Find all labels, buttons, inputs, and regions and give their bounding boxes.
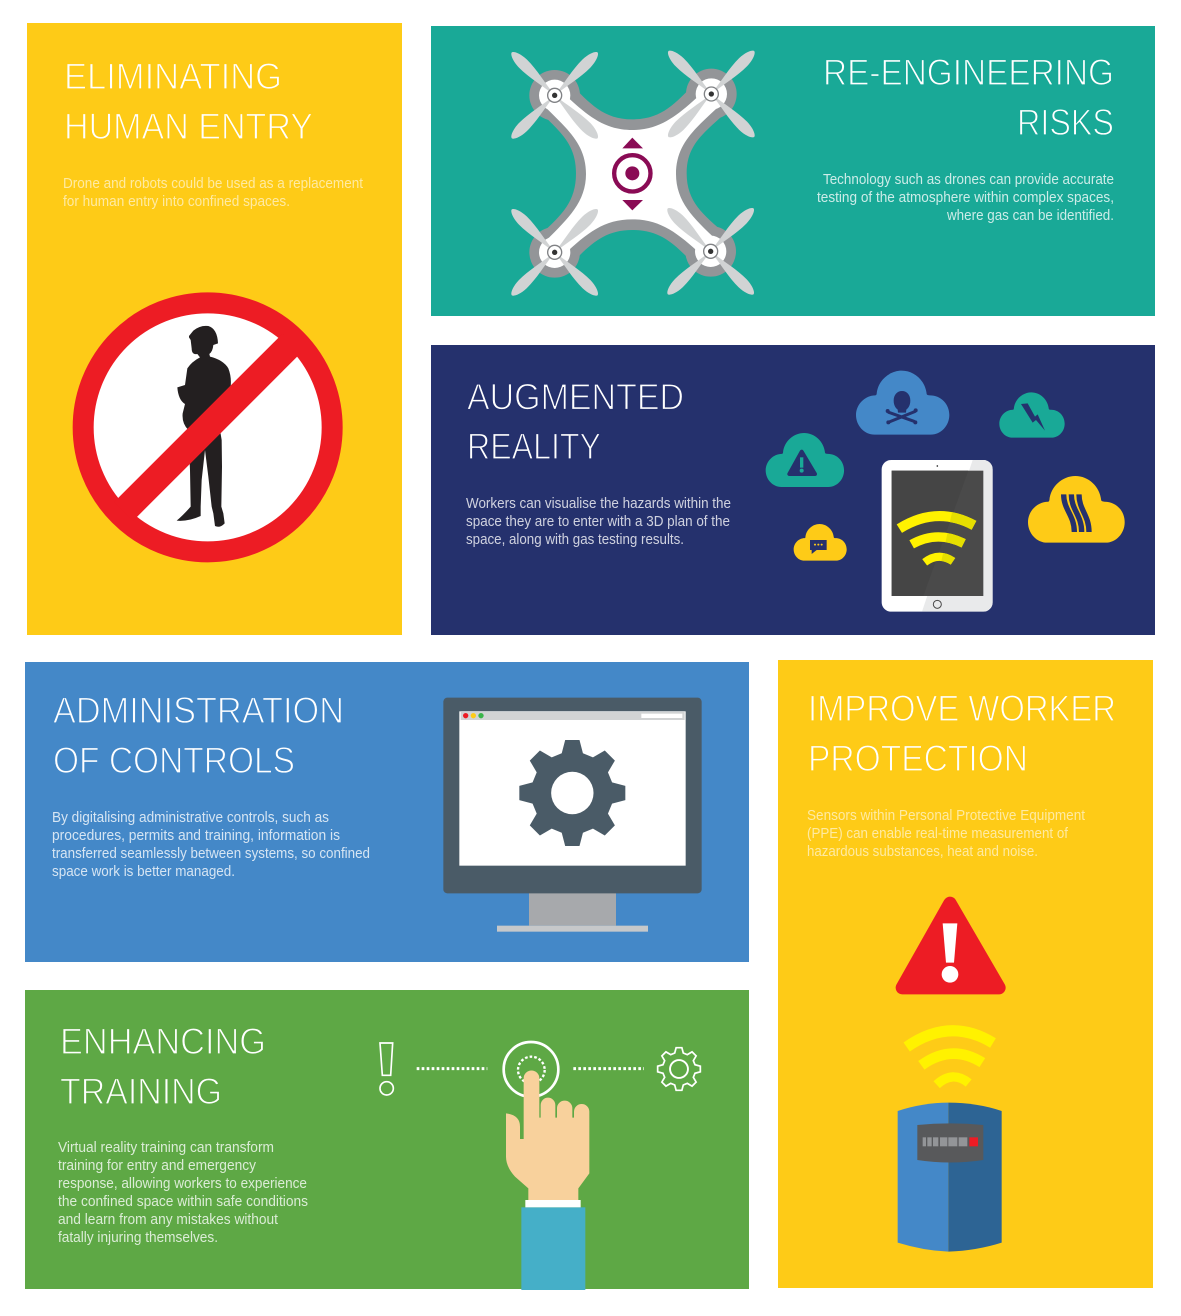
icon: heat cloud bbox=[1028, 476, 1125, 543]
heading: enhancing training bbox=[60, 1021, 266, 1112]
heading: enhancing training: ENHANCING bbox=[60, 1021, 266, 1062]
drone hubs bbox=[548, 87, 718, 259]
icon: drone bbox=[508, 47, 758, 299]
text: re-engineering risks body: where gas can be identified. bbox=[946, 207, 1114, 224]
heading: augmented reality: REALITY bbox=[467, 426, 601, 467]
text: augmented reality body: space, along with gas testing results. bbox=[466, 531, 684, 548]
text: augmented reality body: Workers can visualise the hazards within the bbox=[466, 495, 731, 512]
icon: pointing hand bbox=[506, 1070, 589, 1200]
text: enhancing training body: training for entry and emergency bbox=[58, 1157, 256, 1174]
icon: gear bbox=[519, 740, 625, 846]
text: re-engineering risks body: testing of the atmosphere within complex spaces, bbox=[817, 189, 1114, 206]
text: administration of controls body bbox=[52, 809, 370, 880]
heading: improve worker protection bbox=[808, 688, 1116, 779]
panel: improve worker protection bbox=[778, 660, 1153, 1288]
icon: wifi signal bbox=[907, 1031, 993, 1085]
panel: administration of controls bbox=[25, 662, 749, 962]
icon: tablet with wifi signal bbox=[882, 460, 993, 612]
heading: augmented reality: AUGMENTED bbox=[467, 376, 684, 418]
text: enhancing training body: the confined space within safe conditions bbox=[58, 1193, 308, 1210]
text: enhancing training body: response, allowing workers to experience bbox=[58, 1175, 307, 1192]
heading: administration of controls: OF CONTROLS bbox=[53, 740, 295, 781]
icon: lightning cloud bbox=[999, 392, 1065, 438]
panel: eliminating human entry bbox=[27, 23, 402, 635]
text: improve worker protection body: hazardous substances, heat and noise. bbox=[807, 843, 1038, 860]
text: augmented reality body: space they are to enter with a 3D plan of the bbox=[466, 513, 730, 530]
text: enhancing training body: fatally injuring themselves. bbox=[58, 1229, 218, 1246]
illustration: hand pressing touch button bbox=[380, 1042, 700, 1290]
icon: computer monitor with gear bbox=[443, 698, 702, 932]
drone target symbol bbox=[614, 138, 650, 210]
heading: eliminating human entry: ELIMINATING bbox=[64, 56, 282, 97]
heading: eliminating human entry: HUMAN ENTRY bbox=[64, 106, 313, 147]
illustration: tablet and hazard clouds bbox=[766, 371, 1125, 612]
heading: administration of controls bbox=[53, 690, 344, 781]
icon: sleeve bbox=[521, 1207, 585, 1290]
text: augmented reality body bbox=[466, 495, 731, 548]
panel: enhancing training bbox=[25, 990, 749, 1290]
text: eliminating human entry body bbox=[63, 175, 364, 210]
dotted connectors bbox=[417, 1064, 644, 1073]
heading: re-engineering risks bbox=[823, 52, 1114, 143]
heading: augmented reality bbox=[467, 376, 684, 467]
icon: worker silhouette bbox=[177, 326, 231, 527]
icon: cuff bbox=[525, 1200, 581, 1207]
text: enhancing training body: Virtual reality training can transform bbox=[58, 1139, 274, 1156]
icon: warning triangle bbox=[902, 903, 999, 988]
panel: re-engineering risks bbox=[431, 26, 1155, 316]
text: enhancing training body: and learn from any mistakes without bbox=[58, 1211, 279, 1228]
heading: improve worker protection: PROTECTION bbox=[808, 738, 1028, 779]
icon: exclamation outline bbox=[380, 1043, 393, 1095]
heading: improve worker protection: IMPROVE WORKER bbox=[808, 688, 1116, 729]
icon: touch button rings bbox=[504, 1042, 558, 1097]
icon: gas sensor device bbox=[898, 1103, 1002, 1252]
heading: re-engineering risks: RE-ENGINEERING bbox=[823, 52, 1114, 93]
text: eliminating human entry body: for human entry into confined spaces. bbox=[63, 193, 290, 210]
text: administration of controls body: procedures, permits and training, information is bbox=[52, 827, 340, 844]
heading: enhancing training: TRAINING bbox=[60, 1071, 222, 1112]
heading: eliminating human entry bbox=[64, 56, 313, 147]
drone propellers bbox=[508, 47, 758, 299]
heading: administration of controls: ADMINISTRATION bbox=[53, 690, 344, 731]
text: enhancing training body bbox=[58, 1139, 308, 1246]
text: administration of controls body: space work is better managed. bbox=[52, 863, 235, 880]
illustration: alert and wireless gas sensor bbox=[898, 903, 1002, 1252]
icon: no entry sign with worker silhouette bbox=[83, 303, 332, 552]
text: eliminating human entry body: Drone and robots could be used as a replacement bbox=[63, 175, 364, 192]
text: re-engineering risks body bbox=[817, 171, 1114, 224]
icon: warning cloud bbox=[766, 433, 844, 487]
text: improve worker protection body: (PPE) can enable real-time measurement of bbox=[807, 825, 1069, 842]
text: re-engineering risks body: Technology such as drones can provide accurate bbox=[823, 171, 1114, 188]
text: administration of controls body: By digitalising administrative controls, such as bbox=[52, 809, 329, 826]
icon: gear outline bbox=[658, 1048, 700, 1090]
icon: chat cloud bbox=[794, 524, 847, 561]
icon: skull cloud bbox=[856, 371, 949, 435]
panel: augmented reality bbox=[431, 345, 1155, 635]
heading: re-engineering risks: RISKS bbox=[1017, 102, 1114, 143]
text: improve worker protection body: Sensors within Personal Protective Equipment bbox=[807, 807, 1086, 824]
text: improve worker protection body bbox=[807, 807, 1086, 860]
text: administration of controls body: transferred seamlessly between systems, so confined bbox=[52, 845, 370, 862]
